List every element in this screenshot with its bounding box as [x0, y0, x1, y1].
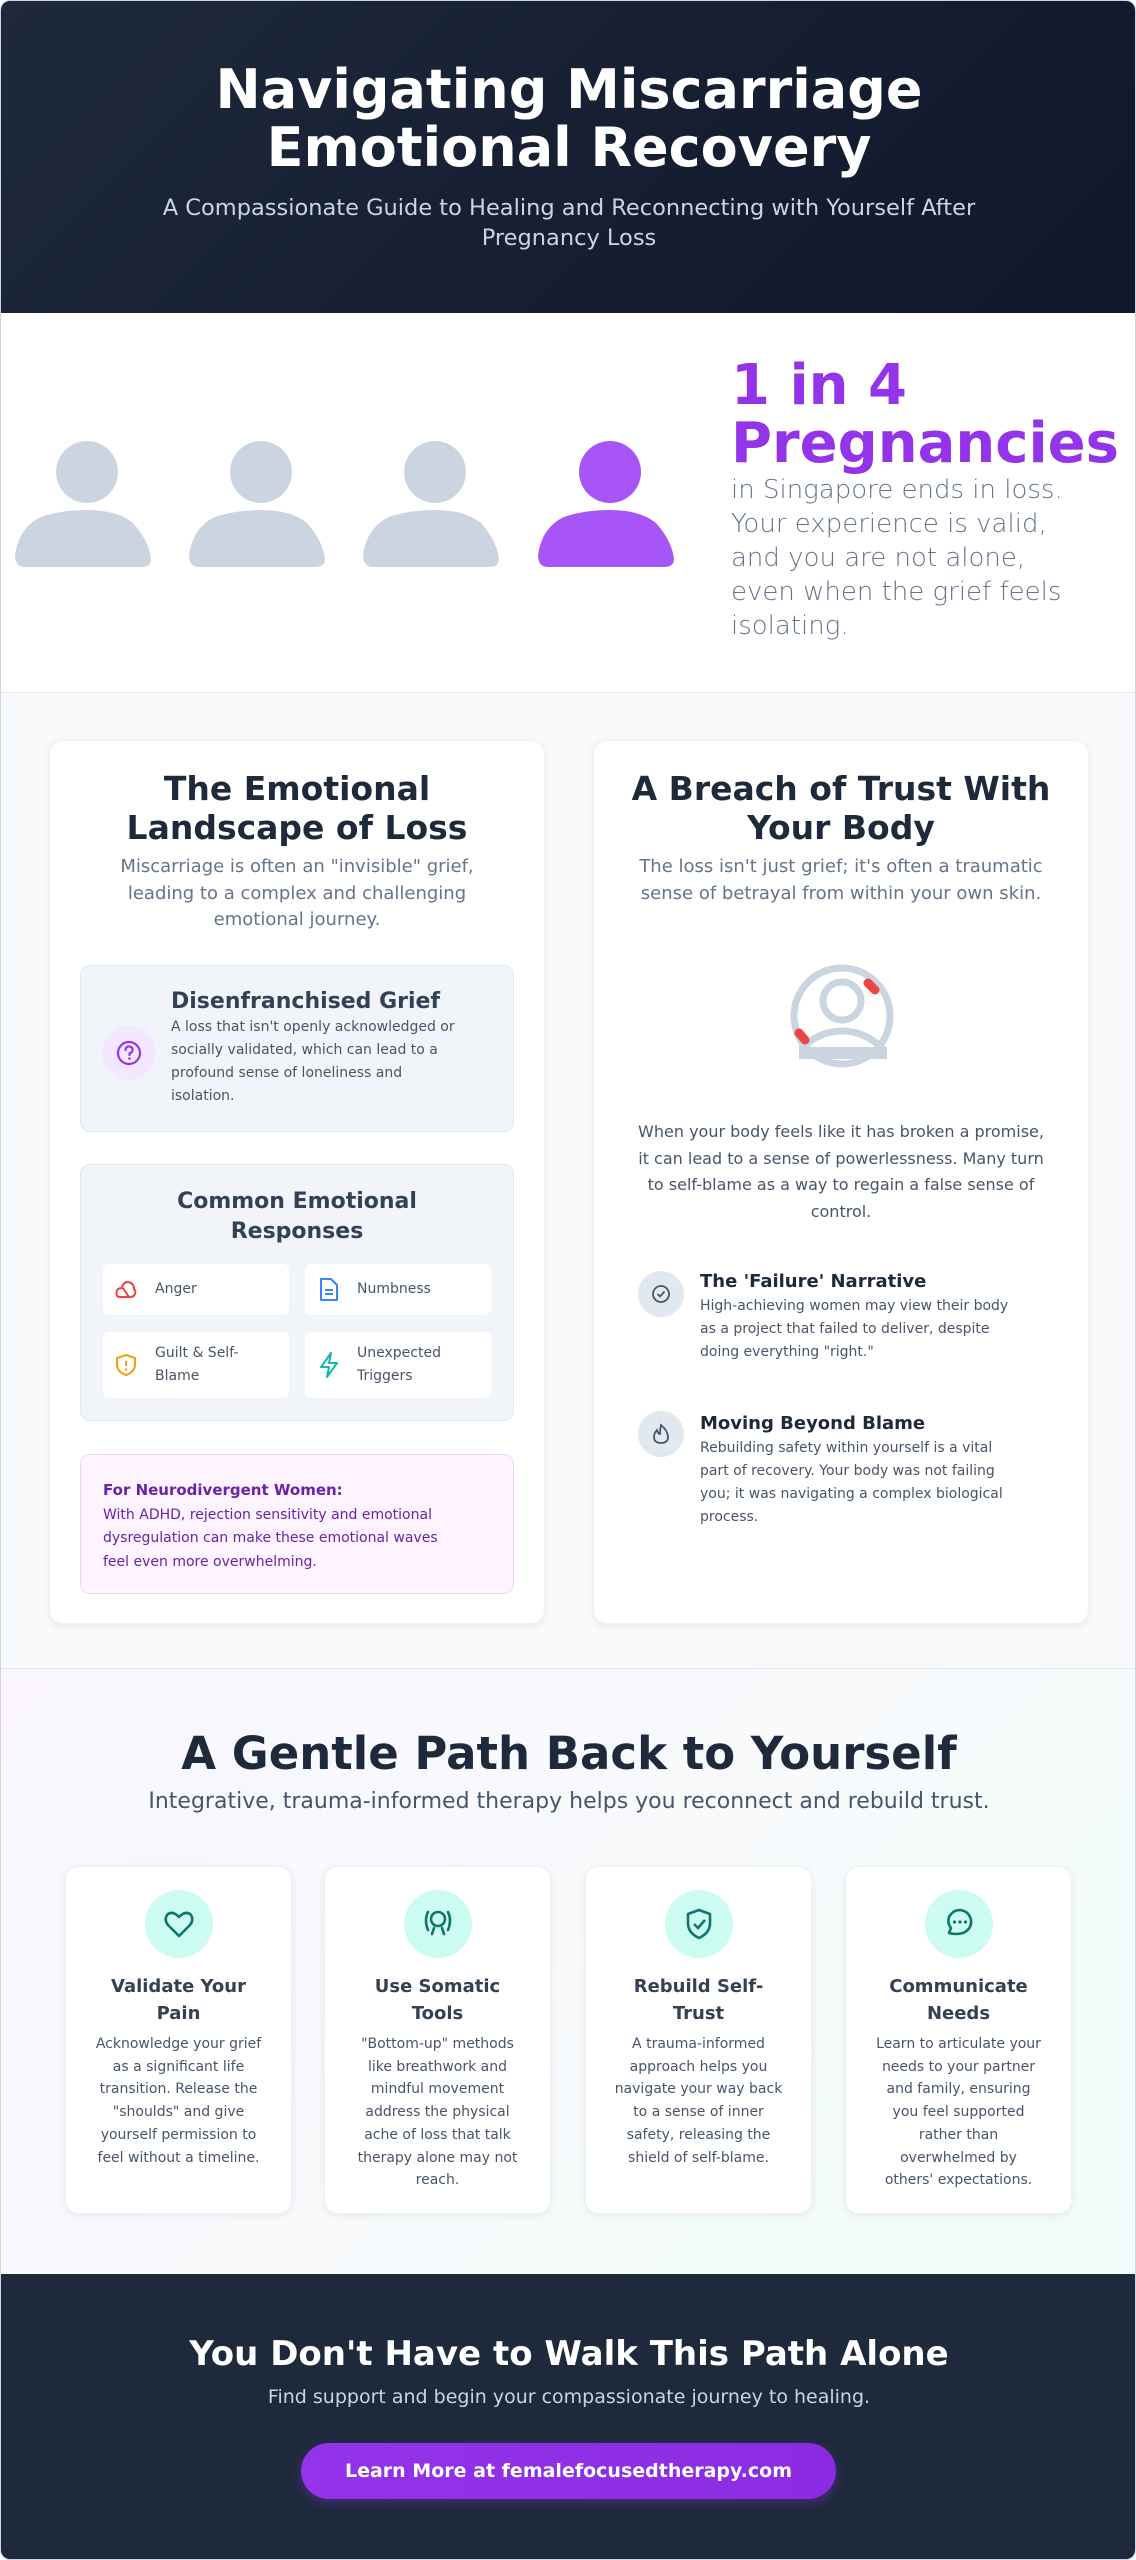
footer: [1, 2274, 1136, 2560]
item: guilt: Blame: [155, 1368, 199, 1384]
item: anger: Anger: [155, 1281, 197, 1297]
card: somatic: reach.: [416, 2172, 459, 2188]
stat text: in Singapore ends in loss.: [731, 475, 1063, 505]
heading: [632, 769, 1050, 847]
card: validate: Validate Your: [111, 1976, 246, 1997]
card: self-trust: [585, 1866, 812, 2214]
card: self-trust: shield of self-blame.: [628, 2150, 769, 2166]
title: Navigating Miscarriage: [216, 58, 922, 121]
header: [1, 1, 1136, 313]
callout: neurodivergent: With ADHD, rejection sensitivity and emotional: [103, 1506, 432, 1522]
item: triggers: Triggers: [357, 1368, 413, 1384]
heading: [177, 1189, 417, 1244]
item: guilt: Guilt & Self-: [155, 1345, 238, 1361]
card: validate: Pain: [157, 2003, 200, 2024]
item: triggers: Unexpected: [357, 1345, 441, 1361]
card: somatic: "Bottom-up" methods: [361, 2036, 514, 2052]
card: self-trust: safety, releasing the: [627, 2127, 770, 2143]
card: validate: "shoulds" and give: [113, 2104, 244, 2120]
card: validate: [65, 1866, 292, 2214]
heading: Common Emotional: [177, 1189, 417, 1214]
card: communicate: you feel supported: [893, 2104, 1024, 2120]
card: communicate: others' expectations.: [885, 2172, 1032, 2188]
card: somatic: [324, 1866, 551, 2214]
item: failure narrative: High-achieving women may view their body: [700, 1298, 1008, 1314]
item: moving beyond blame: you; it was navigating a complex biological: [700, 1486, 1003, 1502]
item: moving beyond blame: [638, 1411, 1003, 1525]
text: isolation.: [171, 1088, 234, 1104]
card: self-trust: to a sense of inner: [633, 2104, 764, 2120]
stat text: Pregnancies: [731, 411, 1119, 476]
heading: [127, 769, 467, 847]
card: somatic: therapy alone may not: [358, 2150, 517, 2166]
text: [171, 989, 455, 1104]
card: somatic: address the physical: [365, 2104, 510, 2120]
card: validate: yourself permission to: [101, 2127, 256, 2143]
footer heading: You Don't Have to Walk This Path Alone: [189, 2334, 949, 2374]
intro text: Miscarriage is often an "invisible" grief,: [120, 856, 474, 877]
stats section: [1, 313, 1136, 693]
icon: four people: [15, 441, 674, 567]
card: somatic: ache of loss that talk: [364, 2127, 511, 2143]
panel: emotional landscape: [49, 740, 545, 1624]
card: somatic: Use Somatic: [375, 1976, 500, 1997]
callout: neurodivergent: For Neurodivergent Women:: [103, 1481, 343, 1499]
card: self-trust: approach helps you: [630, 2059, 767, 2075]
heading: The Emotional: [164, 769, 430, 808]
item: moving beyond blame: process.: [700, 1509, 758, 1525]
item: failure narrative: as a project that failed to deliver, despite: [700, 1321, 990, 1337]
intro text: emotional journey.: [214, 909, 380, 930]
card: communicate: and family, ensuring: [887, 2081, 1030, 2097]
stat text: Your experience is valid,: [731, 509, 1047, 539]
intro text: [639, 856, 1043, 904]
card: somatic: mindful movement: [371, 2081, 504, 2097]
card: validate: transition. Release the: [100, 2081, 257, 2097]
subtitle: A Compassionate Guide to Healing and Reconnecting with Yourself After: [163, 195, 975, 221]
card: somatic: Tools: [412, 2003, 463, 2024]
card: communicate: Learn to articulate your: [876, 2036, 1041, 2052]
stat text: isolating.: [731, 611, 849, 641]
panel: breach of trust: [593, 740, 1089, 1624]
box: common responses: [80, 1164, 514, 1421]
card: self-trust: Rebuild Self-: [634, 1976, 763, 1997]
heading: A Breach of Trust With: [632, 769, 1050, 808]
body text: [638, 1122, 1044, 1220]
card: communicate: overwhelmed by: [900, 2150, 1017, 2166]
section 3: gentle path: [1, 1669, 1136, 2274]
item: failure narrative: [638, 1271, 1008, 1360]
item: guilt: [103, 1332, 289, 1398]
text: A loss that isn't openly acknowledged or: [171, 1019, 455, 1035]
section 2 background: [1, 693, 1136, 1669]
item: anger: [103, 1264, 289, 1315]
heading: Your Body: [747, 808, 935, 847]
heading: Responses: [231, 1219, 363, 1244]
body text: it can lead to a sense of powerlessness. Many turn: [638, 1148, 1044, 1168]
card: validate: Acknowledge your grief: [96, 2036, 261, 2052]
button: Learn More at femalefocusedtherapy.com: [345, 2460, 792, 2482]
card: self-trust: Trust: [673, 2003, 724, 2024]
callout: neurodivergent: dysregulation can make these emotional waves: [103, 1530, 438, 1546]
card: communicate: Needs: [927, 2003, 990, 2024]
title: [216, 58, 922, 179]
stat text: even when the grief feels: [731, 577, 1061, 607]
card: communicate: needs to your partner: [882, 2059, 1035, 2075]
card: self-trust: A trauma-informed: [632, 2036, 765, 2052]
body text: to self-blame as a way to regain a false sense of: [648, 1175, 1034, 1194]
heading: Landscape of Loss: [127, 808, 467, 847]
intro text: The loss isn't just grief; it's often a traumatic: [639, 856, 1043, 877]
text: socially validated, which can lead to a: [171, 1042, 438, 1058]
card: communicate: rather than: [919, 2127, 998, 2143]
intro text: sense of betrayal from within your own skin.: [641, 882, 1041, 904]
card: communicate: [845, 1866, 1072, 2214]
footer text: Find support and begin your compassionate journey to healing.: [268, 2386, 870, 2408]
card: communicate: Communicate: [889, 1976, 1028, 1997]
button: [301, 2443, 836, 2499]
heading: A Gentle Path Back to Yourself: [181, 1727, 957, 1780]
card: validate: as a significant life: [113, 2059, 244, 2075]
intro text: [120, 856, 474, 930]
text: Disenfranchised Grief: [171, 989, 440, 1014]
item: moving beyond blame: Rebuilding safety within yourself is a vital: [700, 1440, 992, 1456]
item: moving beyond blame: part of recovery. Your body was not failing: [700, 1463, 995, 1479]
item: triggers: [305, 1332, 491, 1398]
icon: question: [102, 1026, 156, 1080]
subtitle: Pregnancy Loss: [482, 225, 656, 251]
callout: neurodivergent: feel even more overwhelming.: [103, 1554, 317, 1570]
item: moving beyond blame: Moving Beyond Blame: [700, 1413, 925, 1434]
body text: When your body feels like it has broken a promise,: [638, 1122, 1044, 1141]
item: numbness: [305, 1264, 491, 1315]
callout: neurodivergent: [80, 1454, 514, 1594]
box: disenfranchised grief: [80, 965, 514, 1132]
icon: broken person: [790, 964, 894, 1068]
item: failure narrative: doing everything "right.": [700, 1344, 874, 1360]
card: self-trust: navigate your way back: [615, 2081, 782, 2097]
item: numbness: Numbness: [357, 1281, 431, 1297]
subheading: Integrative, trauma-informed therapy helps you reconnect and rebuild trust.: [148, 1789, 990, 1814]
stat text: [731, 353, 1119, 641]
intro text: leading to a complex and challenging: [128, 882, 466, 904]
item: failure narrative: The 'Failure' Narrative: [700, 1271, 926, 1292]
stat text: and you are not alone,: [731, 543, 1025, 573]
title: Emotional Recovery: [267, 116, 871, 179]
card: somatic: like breathwork and: [368, 2059, 507, 2075]
subtitle: [163, 195, 976, 251]
body text: control.: [811, 1202, 871, 1220]
text: profound sense of loneliness and: [171, 1065, 402, 1081]
card: validate: feel without a timeline.: [98, 2150, 259, 2166]
stat text: 1 in 4: [731, 353, 907, 418]
